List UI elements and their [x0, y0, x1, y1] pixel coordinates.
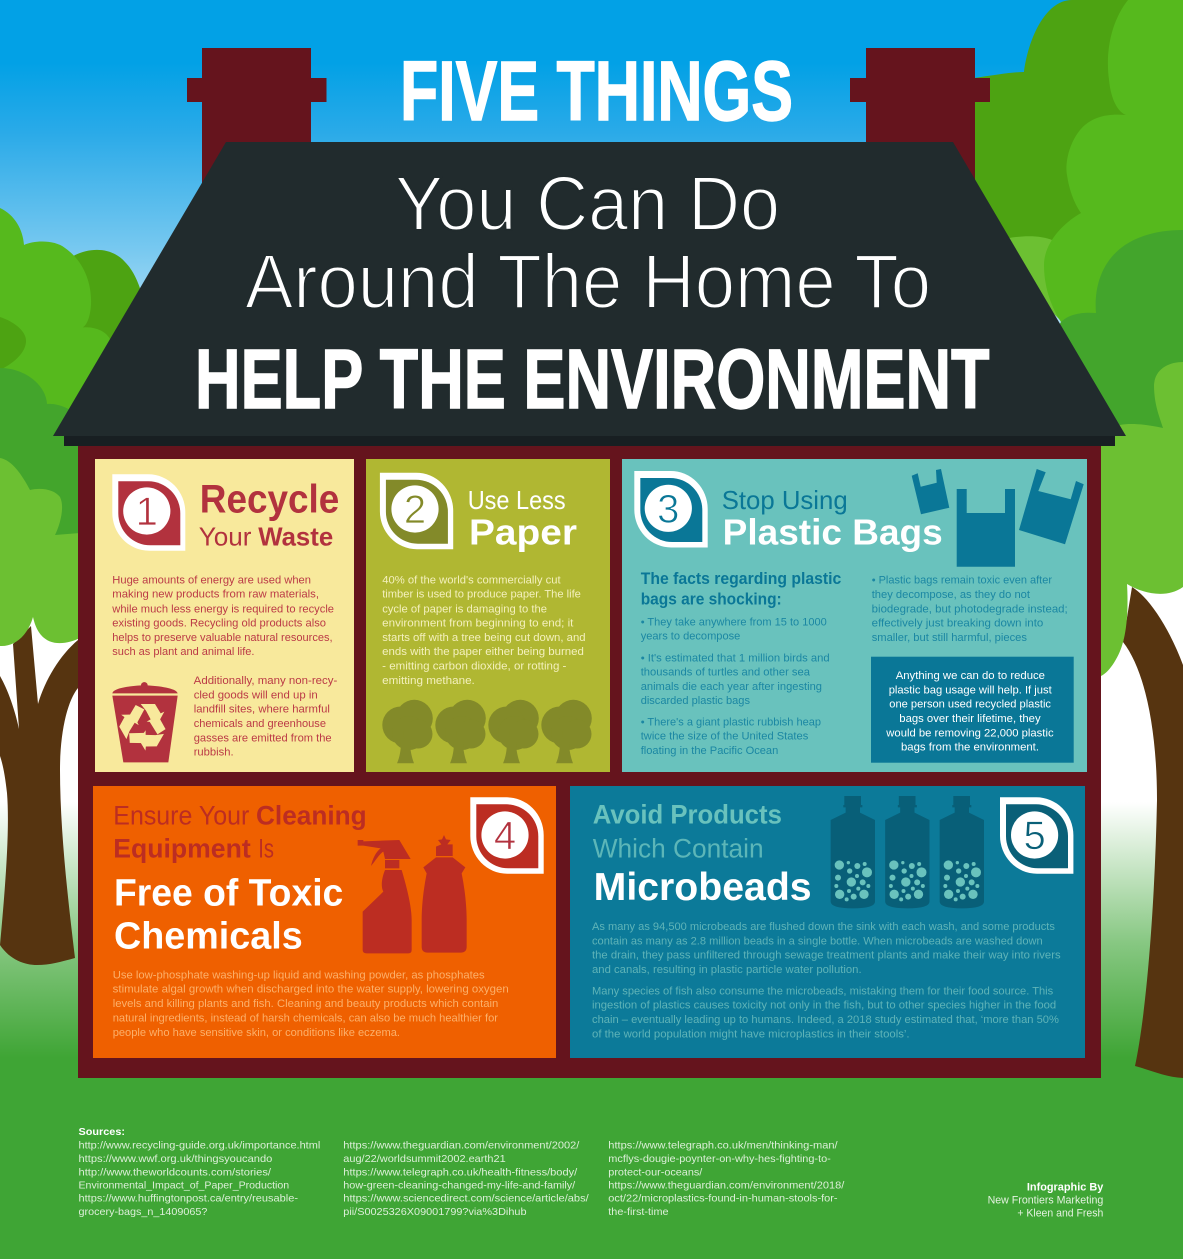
body text: - emitting carbon dioxide, or rotting - [382, 660, 567, 672]
body text: the drain, they pass unfiltered through sewage treatment plants and make their way into rivers [592, 950, 1061, 962]
body text: stimulate algal growth when discharged into the water supply, lowering oxygen [113, 984, 509, 996]
body text: while much less energy is required to recycle [111, 603, 334, 615]
heading: Microbeads [594, 866, 812, 909]
sources column 3 [608, 1140, 844, 1218]
facts list: left column: • It's estimated that 1 million birds and [641, 652, 830, 664]
body text: ends with the paper either being burned [382, 646, 584, 658]
heading: Plastic Bags [723, 511, 943, 552]
heading: white: Free of Toxic [114, 873, 343, 915]
callout: plastic bag usage will help. If just [889, 684, 1053, 696]
badge 5: 5 [1023, 814, 1046, 858]
facts heading [641, 570, 841, 609]
right tree [960, 0, 1183, 1078]
sources column 3: the-first-time [608, 1207, 669, 1218]
body text: levels and killing plants and fish. Cleaning and beauty products which contain [113, 998, 498, 1010]
body text: As many as 94,500 microbeads are flushed down the sink with each wash, and some products [592, 921, 1055, 933]
heading: white: Chemicals [114, 915, 303, 957]
additional text [194, 675, 337, 759]
sources column 1: grocery-bags_n_1409065? [78, 1207, 208, 1218]
facts list: left column: thousands of turtles and other sea [641, 666, 811, 678]
facts list: left column: discarded plastic bags [641, 695, 750, 707]
facts list: right column: they decompose, as they do not [872, 589, 1031, 601]
facts heading: The facts regarding plastic [641, 570, 841, 588]
additional text: rubbish. [194, 747, 234, 759]
heading: white [114, 873, 343, 957]
body text: Huge amounts of energy are used when [112, 574, 311, 586]
body text [382, 574, 586, 687]
heading: dark: Equipment [113, 833, 251, 863]
body text: 40% of the world's commercially cut [382, 574, 561, 586]
body text: environment from beginning to end; it [382, 618, 574, 630]
facts list: right column: smaller, but still harmful, pieces [872, 632, 1027, 644]
sources column 1: http://www.theworldcounts.com/stories/ [78, 1167, 271, 1178]
callout: would be removing 22,000 plastic [885, 727, 1054, 739]
facts list: right column: • Plastic bags remain toxic even after [872, 575, 1052, 587]
body text: timber is used to produce paper. The life [382, 589, 581, 601]
badge 4 [470, 797, 544, 874]
icon: recycling bin [112, 682, 178, 762]
sources column 1: https://www.wwf.org.uk/thingsyoucando [78, 1154, 273, 1165]
sources heading: Sources: [78, 1127, 125, 1138]
credits: Infographic By [1027, 1181, 1103, 1193]
credits [988, 1181, 1103, 1220]
heading: dark: Ensure Your [113, 800, 249, 830]
callout: bags over their lifetime, they [899, 713, 1041, 725]
heading: Which Contain [593, 833, 764, 863]
panel: cleaning equipment [93, 786, 556, 1058]
badge 3: 3 [657, 487, 679, 531]
body text [113, 969, 509, 1039]
sources column 2 [343, 1140, 589, 1218]
body text: helps to preserve valuable natural resources, [112, 632, 333, 644]
heading [722, 485, 943, 552]
subtitle: You Can Do [395, 161, 780, 247]
icon: spray bottle and detergent bottle [358, 835, 467, 953]
heading: Use Less [468, 485, 566, 515]
body text: emitting methane. [382, 675, 475, 687]
house roof [53, 142, 1126, 446]
body text: of the world population might have microplastics in their stools’. [592, 1028, 910, 1040]
body text: and canals, resulting in plastic particle water pollution. [592, 964, 862, 976]
panel: microbeads [570, 786, 1085, 1058]
callout: one person used recycled plastic [889, 699, 1051, 711]
subtitle: Around The Home To [245, 239, 931, 325]
sources column 2: https://www.telegraph.co.uk/health-fitness/body/ [343, 1167, 577, 1178]
sources column 3: protect-our-oceans/ [608, 1167, 702, 1178]
icon: four trees [382, 700, 592, 763]
body text: natural ingredients, instead of harsh chemicals, can also be much healthier for [113, 1012, 498, 1024]
facts list: left column: floating in the Pacific Ocean [641, 745, 778, 757]
heading [593, 799, 812, 909]
sources column 2: https://www.theguardian.com/environment/2002/ [343, 1140, 579, 1151]
sources column 1: Environmental_Impact_of_Paper_Production [78, 1180, 289, 1191]
facts heading: bags are shocking: [641, 591, 782, 609]
icon: three microbead bottles [831, 796, 984, 908]
sources column 3: https://www.theguardian.com/environment/2018/ [608, 1180, 844, 1191]
subtitle [245, 161, 931, 325]
credits: + Kleen and Fresh [1017, 1208, 1103, 1220]
body text [111, 574, 334, 658]
heading: Your [199, 522, 252, 552]
heading: Stop Using [722, 485, 848, 515]
body text: ingestion of plastics causes toxicity not only in the fish, but to other species higher in the food [592, 1000, 1056, 1012]
heading: dark: Cleaning [256, 800, 367, 830]
heading: dark: Is [258, 833, 274, 863]
sources column 2: how-green-cleaning-changed-my-life-and-family/ [343, 1180, 575, 1191]
heading [199, 477, 339, 552]
body text [592, 921, 1061, 1040]
sources column 2: https://www.sciencedirect.com/science/article/abs/ [343, 1194, 589, 1205]
callout: Anything we can do to reduce [896, 670, 1045, 682]
facts list: left column: • There's a giant plastic rubbish heap [641, 716, 821, 728]
sources column 1 [78, 1140, 320, 1218]
facts list: left column: • They take anywhere from 15 to 1000 [641, 616, 827, 628]
body text: making new products from raw materials, [112, 589, 319, 601]
body text: people who have sensitive skin, or conditions like eczema. [113, 1027, 400, 1039]
panel: use less paper [366, 459, 610, 772]
body text: such as plant and animal life. [112, 646, 254, 658]
heading [468, 485, 577, 552]
body text: Many species of fish also consume the microbeads, mistaking them for their food source. This [592, 985, 1053, 997]
badge 3 [634, 471, 708, 548]
sources column 3: mcflys-dougie-poynter-on-why-hes-fighting-to- [608, 1154, 831, 1165]
heading: Waste [258, 522, 333, 552]
panel: recycle your waste [95, 459, 354, 772]
badge 1: 1 [136, 490, 158, 534]
body text: Use low-phosphate washing-up liquid and washing powder, as phosphates [113, 969, 485, 981]
body text: existing goods. Recycling old products also [112, 618, 326, 630]
facts list: right column: biodegrade, but photodegrade instead; [872, 603, 1068, 615]
heading: Paper [469, 511, 577, 552]
additional text: cled goods will end up in [194, 689, 318, 701]
heading: Avoid Products [593, 799, 782, 829]
additional text: gasses are emitted from the [194, 732, 332, 744]
left tree [0, 208, 150, 965]
additional text: chemicals and greenhouse [194, 718, 326, 730]
icon: plastic bags [912, 469, 1084, 567]
sources column 1: http://www.recycling-guide.org.uk/importance.html [78, 1140, 320, 1151]
additional text: Additionally, many non-recy- [194, 675, 337, 687]
facts list: right column: effectively just breaking down into [872, 618, 1043, 630]
heading: dark [113, 800, 367, 863]
badge 1 [112, 474, 185, 551]
body text: contain as many as 2.8 million beads in a single bottle. When microbeads are washed down [592, 935, 1043, 947]
body text: starts off with a tree being cut down, and [382, 632, 586, 644]
credits: New Frontiers Marketing [988, 1194, 1103, 1206]
sources column 3: oct/22/microplastics-found-in-human-stools-for- [608, 1194, 838, 1205]
sources column 2: aug/22/worldsummit2002.earth21 [343, 1154, 506, 1165]
badge 2: 2 [404, 488, 426, 532]
facts list: left column [641, 616, 830, 757]
house wall [78, 446, 1101, 1078]
callout [871, 657, 1074, 763]
badge 2 [380, 473, 453, 549]
facts list: right column [872, 575, 1068, 644]
facts list: left column: years to decompose [641, 631, 740, 643]
right chimney [850, 48, 990, 198]
facts list: left column: animals die each year after ingesting [641, 681, 822, 693]
panel: stop using plastic bags [622, 459, 1087, 772]
additional text: landfill sites, where harmful [194, 703, 330, 715]
title: five things: FIVE THINGS [400, 44, 793, 138]
left chimney [187, 48, 326, 218]
badge 4: 4 [494, 814, 516, 858]
facts list: left column: twice the size of the United States [641, 731, 809, 743]
sources column 3: https://www.telegraph.co.uk/men/thinking-man/ [608, 1140, 838, 1151]
body text: cycle of paper is damaging to the [382, 603, 547, 615]
body text: chain – eventually leading up to humans. Indeed, a 2018 study estimated that, ‘more than 50% [592, 1014, 1059, 1026]
callout: bags from the environment. [901, 742, 1039, 754]
sources [78, 1127, 844, 1218]
badge 5 [1000, 797, 1073, 874]
heading: Recycle [200, 477, 339, 521]
sources column 1: https://www.huffingtonpost.ca/entry/reusable- [78, 1194, 298, 1205]
sources column 2: pii/S0025326X09001799?via%3Dihub [343, 1207, 527, 1218]
